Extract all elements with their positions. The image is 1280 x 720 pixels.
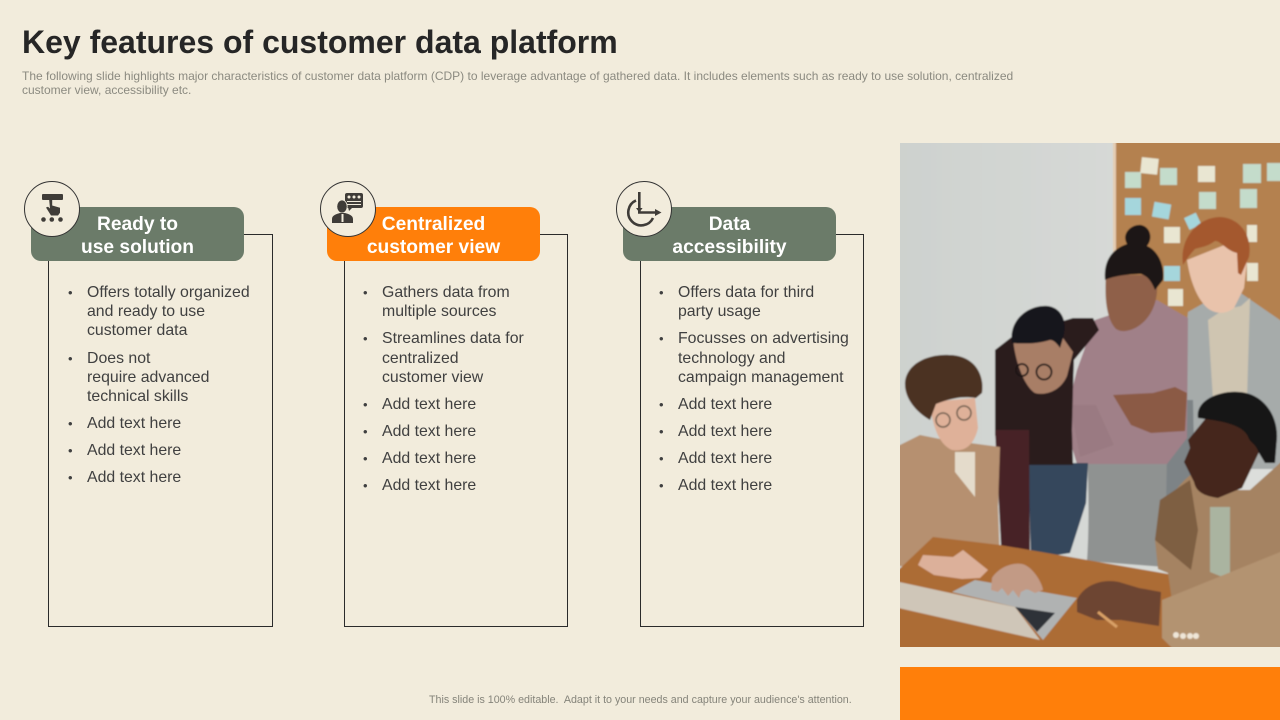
subtitle text: The following slide highlights major characteristics of customer data platform (CDP) to leverage advantage of gathered data. It includes elements such as ready to use solution, centralized [22, 69, 1013, 83]
pencil [1098, 612, 1117, 627]
bullet list 3: Add text here [678, 423, 772, 440]
bullet list 3: Focusses on advertising [678, 330, 849, 347]
bullet list 1: customer data [87, 322, 187, 339]
subtitle text: customer view, accessibility etc. [22, 83, 191, 97]
bullet list 1: and ready to use [87, 303, 205, 320]
bullet list 2: Add text here [382, 477, 476, 494]
woman's hand on table [918, 550, 988, 579]
bullet list 2: centralized [382, 350, 459, 366]
bullet list 1: Add text here [87, 415, 181, 432]
table [890, 537, 1243, 657]
bullet list 2: multiple sources [382, 303, 496, 320]
heading: ready to use solution: use solution [81, 237, 194, 258]
heading: data accessibility: Data [709, 214, 750, 235]
bullet list 3: Add text here [678, 450, 772, 467]
heading: centralized customer view: Centralized [382, 214, 485, 235]
panel outline 1 [48, 234, 273, 627]
bullet list 2 [364, 284, 524, 494]
panel outline 2 [344, 234, 568, 627]
heading: ready to use solution [31, 207, 244, 261]
heading: centralized customer view: customer view [367, 237, 500, 258]
person: woman in pink sweater [1059, 225, 1188, 567]
cork board [1113, 133, 1280, 330]
wall [890, 133, 1280, 657]
icon: customer with rating speech bubble [320, 181, 376, 237]
bullet list 2: customer view [382, 369, 483, 386]
footer note: This slide is 100% editable. Adapt it to your needs and capture your audience's attention. [429, 694, 852, 706]
heading: ready to use solution: Ready to [97, 214, 178, 235]
person: man in tan blazer [1077, 392, 1280, 658]
bullet list 3: party usage [678, 303, 761, 320]
laptop [890, 580, 1077, 640]
person: man with glasses [995, 306, 1099, 563]
person: woman with curly hair [890, 355, 1000, 573]
panel: centralized customer view [320, 181, 568, 627]
bullet list 3: Offers data for third [678, 284, 814, 301]
bullet list 2: Add text here [382, 450, 476, 467]
heading: centralized customer view [327, 207, 540, 261]
bullet list 1: Add text here [87, 442, 181, 459]
panel outline 3 [640, 234, 864, 627]
bullet list 1: Does not [87, 350, 150, 366]
bullet list 2: Add text here [382, 423, 476, 440]
bullet list 3: technology and [678, 350, 785, 366]
title: Key features of customer data platform [22, 24, 618, 60]
bullet list 1: Add text here [87, 469, 181, 486]
bullet list 1 [68, 284, 250, 486]
bullet list 3: campaign management [678, 369, 844, 386]
bullet list 1: Offers totally organized [87, 284, 250, 301]
orange accent bar [900, 667, 1280, 720]
bullet list 3: Add text here [678, 477, 772, 494]
bullet list 1: require advanced [87, 369, 209, 386]
heading: data accessibility: accessibility [672, 237, 787, 258]
heading: data accessibility [623, 207, 836, 261]
panel: data accessibility [616, 181, 864, 627]
bullet list 2: Gathers data from [382, 284, 510, 301]
icon: accessibility dial with arrows [616, 181, 672, 237]
subtitle text [22, 69, 1013, 97]
bullet list 2: Add text here [382, 396, 476, 413]
panel: ready to use solution [24, 181, 273, 627]
bullet list 3: Add text here [678, 396, 772, 413]
bullet list 3 [660, 284, 849, 494]
hand on laptop [991, 564, 1043, 598]
bullet list 2: Streamlines data for [382, 330, 524, 347]
photo: team around a laptop [900, 143, 1280, 647]
bullet list 1: technical skills [87, 388, 188, 405]
person: man in grey blazer [1163, 217, 1280, 529]
icon: touch interface [24, 181, 80, 237]
